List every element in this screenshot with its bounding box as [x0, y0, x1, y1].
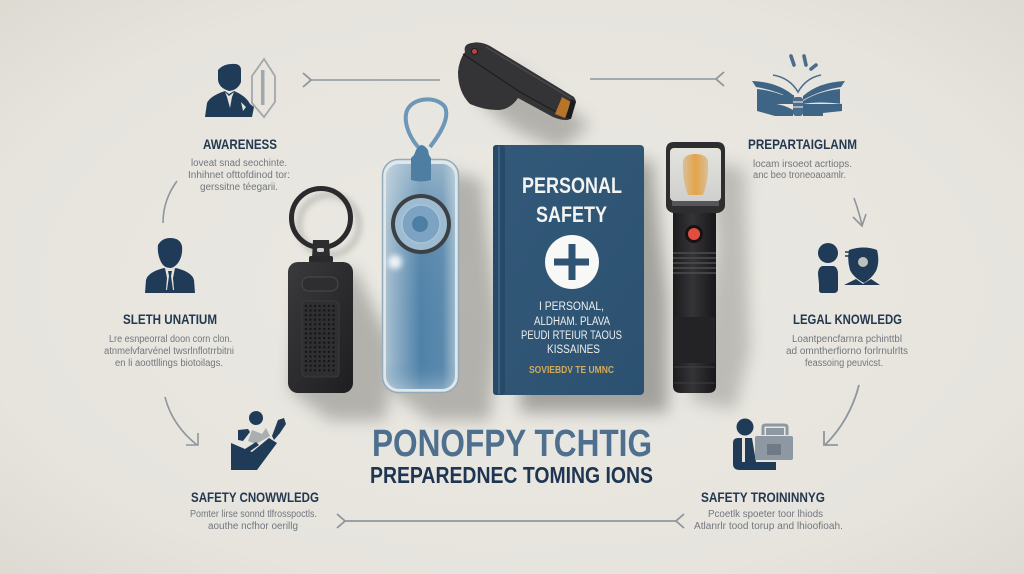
title line 1: PONOFPY TCHTIG — [372, 423, 652, 465]
arrow: top left — [311, 79, 440, 81]
heading: SAFETY TROININNYG — [701, 489, 825, 505]
description: aouthe ncfhor oerillg — [208, 521, 298, 532]
panel: sleth unatium — [104, 238, 234, 369]
description — [694, 509, 843, 532]
icon: hands and document — [231, 411, 286, 470]
icon: person with shield — [205, 59, 275, 117]
heading: AWARENESS — [203, 136, 277, 152]
transparent blue alarm — [382, 99, 500, 420]
panel: safety knowledge — [190, 411, 319, 532]
title — [370, 423, 653, 488]
keychain alarm — [288, 188, 395, 420]
description: en li aoottllings biotoilags. — [115, 358, 223, 369]
icon: open book with rays — [752, 56, 845, 116]
description — [104, 334, 234, 369]
description — [786, 334, 908, 369]
description: loveat snad seochinte. — [191, 158, 287, 169]
arrow: upper left arc — [163, 181, 177, 223]
description: anc beo troneoaoamlr. — [753, 170, 846, 181]
description: locam irsoeot acrtiops. — [753, 159, 852, 170]
panel: legal knowledge — [786, 243, 908, 369]
icon: person and badge — [818, 243, 880, 293]
description: Inhihnet ofttofdinod tor: — [188, 170, 290, 181]
arrow: top right — [590, 78, 716, 80]
heading: PREPARTAIGLANM — [748, 136, 857, 152]
description: Pcoetlk spoeter toor lhiods — [708, 509, 823, 520]
panel: awareness — [188, 59, 290, 193]
icon: person — [145, 238, 195, 293]
panel: safety training — [694, 418, 843, 532]
book text: PEUDI RTEIUR TAOUS — [521, 330, 622, 342]
description: gerssitne téegarii. — [200, 182, 278, 193]
book title: PERSONAL — [522, 173, 622, 198]
book subtitle: SAFETY — [536, 202, 607, 227]
flashlight — [666, 142, 750, 410]
panel: preparation plan — [748, 56, 857, 181]
icon: medical cross — [545, 235, 599, 289]
description: Loantpencfarnra pchinttbl — [792, 334, 902, 345]
description: feassoing peuvicst. — [805, 358, 883, 369]
description: Atlanrlr tood torup and lhioofioah. — [694, 521, 843, 532]
heading: SLETH UNATIUM — [123, 311, 217, 327]
book text: ALDHAM. PLAVA — [534, 316, 610, 328]
book footer: SOVIEBDV TE UMNC — [529, 365, 614, 376]
book — [493, 145, 668, 412]
arrow: lower left arc — [165, 397, 198, 445]
description: Pomter lirse sonnd tlfrosspoctls. — [190, 509, 317, 520]
book text: I PERSONAL, — [539, 301, 604, 313]
heading: SAFETY CNOWWLEDG — [191, 489, 319, 505]
whistle — [458, 42, 590, 150]
description: ad omntherfiorno forlrnulrlts — [786, 346, 908, 357]
description — [190, 509, 317, 532]
book text: KISSAINES — [547, 344, 600, 356]
icon: person and case — [733, 418, 793, 470]
description: Lre esnpeorral doon corn clon. — [109, 334, 232, 345]
heading: LEGAL KNOWLEDG — [793, 311, 902, 327]
title line 2: PREPAREDNEC TOMING IONS — [370, 462, 653, 488]
description: atnmelvfarvénel twsrlnflotrrbitni — [104, 346, 234, 357]
arrow: lower right arc — [824, 385, 859, 445]
arrow: upper right — [853, 198, 866, 226]
description — [188, 158, 290, 193]
description — [753, 159, 852, 181]
book text — [521, 301, 622, 356]
arrow: bottom double-headed — [345, 520, 676, 522]
